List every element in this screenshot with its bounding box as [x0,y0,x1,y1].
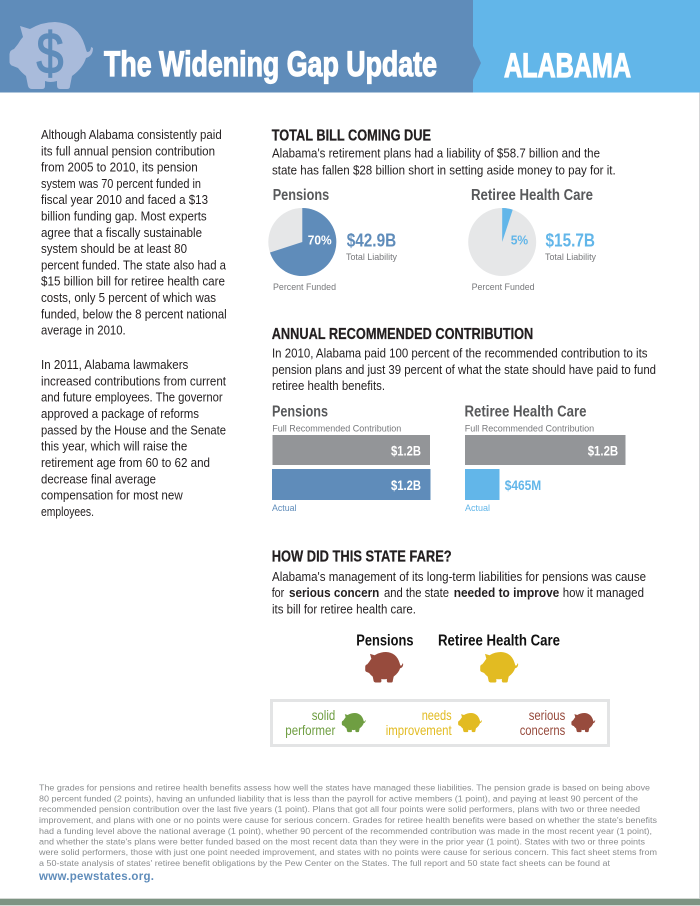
icon: red pig, pensions grade [365,652,403,682]
assessment text: for [272,585,285,600]
text block: state summary [41,127,227,519]
assessment text: Alabama's management of its long-term liabilities for pensions was cause [272,569,646,584]
header banner [0,0,700,92]
intro text: Alabama's retirement plans had a liability of $58.7 billion and the [272,146,600,161]
text block: state summary: billion funding gap. Most experts [41,208,207,224]
text block: state summary: funded, below the 8 percent national [41,306,227,321]
text block: state summary: decrease final average [41,471,156,486]
subheading: pensions: Pensions [273,187,329,204]
value: retiree health care liability: Total Liability [545,251,596,262]
assessment text: and the state [384,585,449,600]
text block: state summary: increased contributions from current [41,373,226,388]
bar chart: retiree health care contribution: $465M [505,478,541,493]
subheading: retiree health care: Retiree Health Care [464,404,587,421]
text block: state summary: $15 billion bill for retiree health care [41,274,225,289]
text block: state summary: retirement age from 60 to 62 and [41,455,210,470]
footnote: methodology: recommended pension contribution over the last five years (1 point). Plans that got all four points were solid performers, plans with two or three needed [39,804,640,814]
panel: total bill coming due [268,128,616,292]
bar chart: pensions contribution: $1.2B [391,444,421,459]
legend item: serious concerns [520,707,595,738]
legend item: solid performer: performer [285,722,336,738]
heading: ANNUAL RECOMMENDED CONTRIBUTION [272,326,533,343]
assessment text [272,569,646,616]
text block: state summary: average in 2010. [41,323,126,338]
arrow notch [473,46,481,80]
label: percent funded: Percent Funded [273,281,336,292]
bar chart: retiree health care contribution: $1.2B [588,444,618,459]
pie chart: pensions 70 percent funded [268,208,336,276]
legend [272,700,608,746]
intro text [272,146,616,177]
value: retiree health care liability: $15.7B [546,231,595,251]
value: pensions liability [346,231,397,262]
intro text: retiree health benefits. [272,378,385,393]
intro text [272,346,656,393]
icon: piggy bank with dollar sign [9,21,93,89]
footnote: methodology [38,782,657,883]
panel: annual recommended contribution [272,326,656,513]
value: pensions liability: $42.9B [347,231,396,251]
grade label: retiree health care: Retiree Health Care [438,633,560,650]
assessment text: how it managed [563,585,644,600]
bar chart: pensions contribution: Full Recommended Contribution [272,423,401,434]
legend item: solid performer: solid [312,707,335,723]
bar chart: retiree health care contribution: Full Recommended Contribution [465,423,594,434]
intro text: state has fallen $28 billion short in setting aside money to pay for it. [272,162,616,177]
subheading: retiree health care: Retiree Health Care [471,187,593,204]
pie chart: retiree health care 5 percent funded: 5% [511,234,528,248]
text block: state summary: system should be at least 80 [41,241,187,256]
text block: state summary: approved a package of reforms [41,406,199,421]
intro text: In 2010, Alabama paid 100 percent of the recommended contribution to its [272,346,648,361]
text block: state summary: In 2011, Alabama lawmakers [41,357,189,372]
title: The Widening Gap Update [104,44,437,84]
text block: state summary: its full annual pension contribution [41,143,215,158]
link: website: www.pewstates.org. [38,871,154,883]
footer bar [0,898,700,906]
footnote: methodology: had a funding level above the national average (1 point), whether 90 percent of the recommended contribution was made in the most recent year (1 point), [39,826,652,836]
value: pensions liability: Total Liability [346,251,397,262]
text block: state summary: employees. [41,504,94,519]
text block: state summary: agree that a fiscally sustainable [41,225,202,240]
text block: state summary: and future employees. The governor [41,390,223,405]
assessment text: serious concern [289,585,379,600]
text block: state summary: this year, which will raise the [41,439,187,454]
bar chart: pensions contribution: $1.2B [391,478,421,493]
footnote: methodology: and whether the state's plans were better funded based on the most recent data than they were in the prior year (1 point). States with two or three points [39,837,645,847]
heading: TOTAL BILL COMING DUE [272,128,431,145]
subheading: pensions: Pensions [272,404,328,421]
text block: state summary: percent funded. The state also had a [41,257,227,272]
panel: how did this state fare [272,549,646,746]
text block: state summary: fiscal year 2010 and faced a $13 [41,192,208,207]
grade label: pensions: Pensions [356,633,414,650]
assessment text: needed to improve [454,585,559,600]
legend item: serious concerns: concerns [520,722,565,738]
text block: state summary: system was 70 percent funded in [41,176,201,191]
footnote: methodology: The grades for pensions and retiree health benefits assess how well the states have managed these liabilities. The pension grade is based on being above [39,782,650,792]
text block: state summary: costs, only 5 percent of which was [41,290,216,305]
footnote: methodology: a 50-state analysis of states' retiree benefit obligations by the Pew Center on the States. The full report and 50 state fact sheets can be found at [39,858,611,868]
pie chart: retiree health care 5 percent funded [468,208,536,276]
icon: piggy bank with dollar sign: $ [36,21,64,86]
bar chart: pensions contribution [272,423,430,513]
footnote: methodology: 80 percent funded (2 points), having an unfunded liability that is less than the payroll for active members (1 point), and paying at least 90 percent of the [39,793,638,803]
pie chart: pensions 70 percent funded: 70% [308,234,332,248]
label: percent funded: Percent Funded [472,281,535,292]
value: retiree health care liability [545,231,596,262]
bar chart: retiree health care contribution [465,423,626,513]
legend item: serious concerns: serious [529,707,565,723]
legend item: solid performer [285,707,366,738]
heading: HOW DID THIS STATE FARE? [272,549,452,566]
bar chart: pensions contribution: Actual [272,502,296,513]
legend item: needs improvement [386,707,482,738]
text block: state summary: compensation for most new [41,488,183,503]
assessment text: its bill for retiree health care. [272,601,416,616]
icon: yellow pig, retiree health care grade [480,652,518,682]
legend item: needs improvement: improvement [386,722,452,738]
legend item: needs improvement: needs [422,707,452,723]
footnote: methodology: improvement, and plans with one or no points were cause for serious concern. Grades for retiree health benefits were based on whether the state's benefits [39,815,657,825]
footnote: methodology: were solid performers, those with just one point needed improvement, and states with no points were cause for serious concern. This fact sheet stems from [38,847,657,857]
state name: ALABAMA [504,47,631,85]
text block: state summary: from 2005 to 2010, its pension [41,160,198,175]
bar chart: retiree health care contribution: Actual [465,502,490,513]
text block: state summary: Although Alabama consistently paid [41,127,222,142]
text block: state summary: passed by the House and the Senate [41,422,226,437]
